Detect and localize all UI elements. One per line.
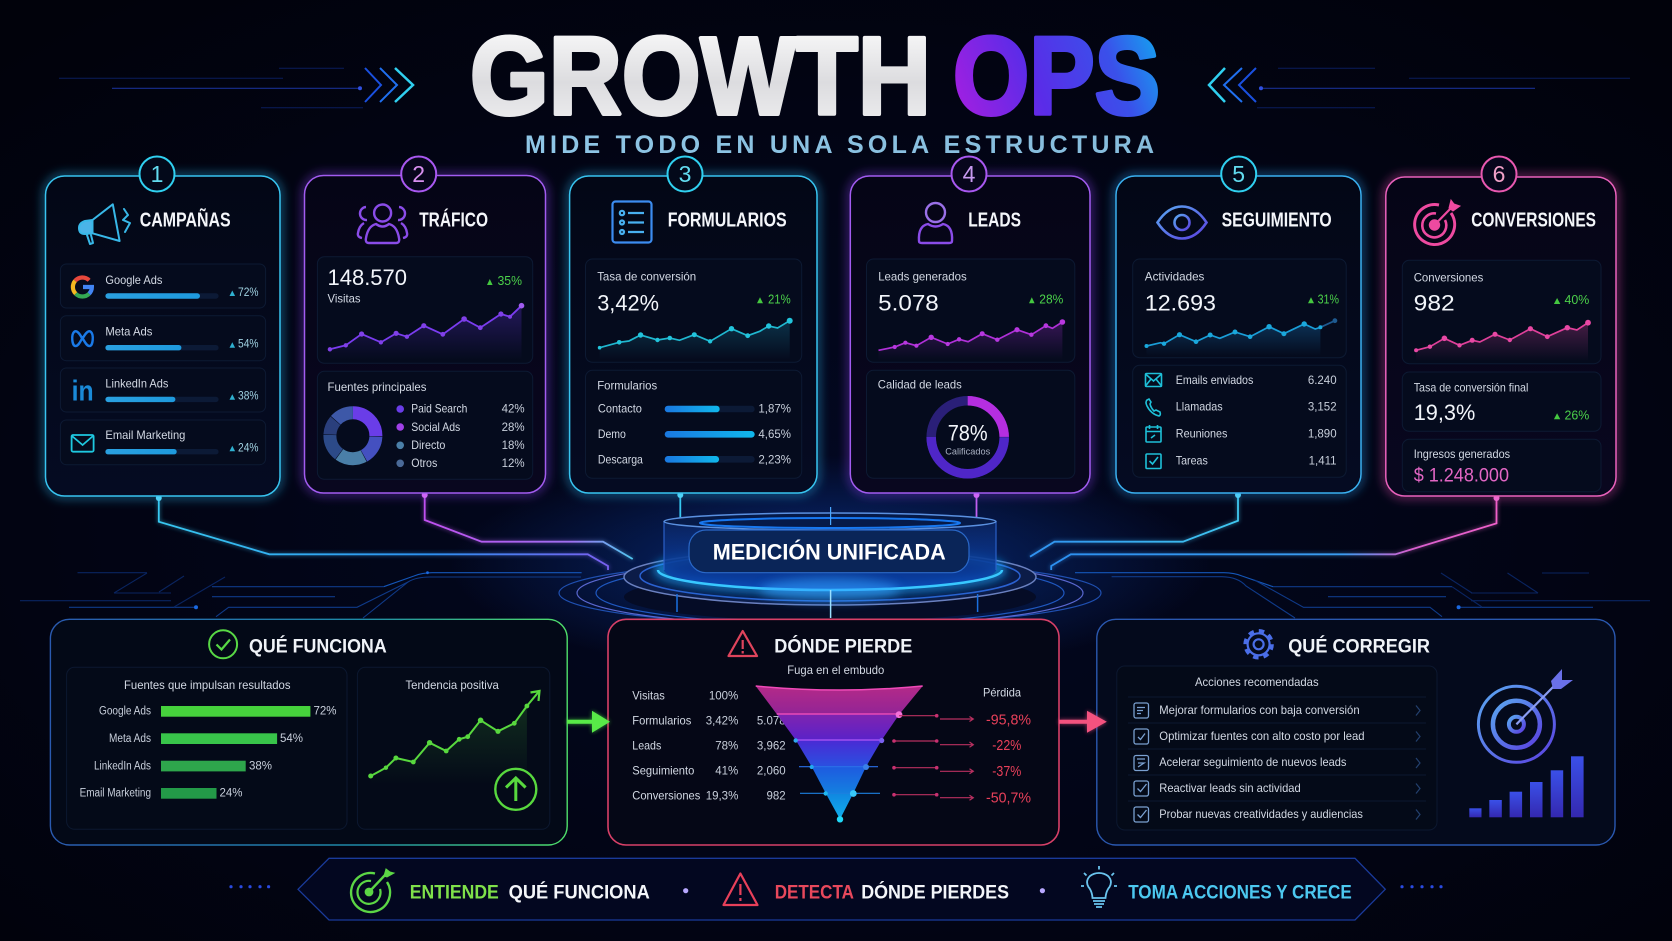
panel: tasa final xyxy=(1402,372,1601,431)
panel: fuentes principales xyxy=(317,371,533,479)
panel: leads generados xyxy=(866,259,1075,362)
panel: visitas: Visitas xyxy=(328,292,360,306)
panel: formularios table: 2,23% xyxy=(758,454,791,466)
funnel table: 3,42% xyxy=(706,715,738,727)
panel: calidad de leads: 78% xyxy=(948,420,988,446)
panel: actividades: 31% xyxy=(1318,291,1339,306)
panel: formularios table: 1,87% xyxy=(758,404,791,416)
subtitle: MIDE TODO EN UNA SOLA ESTRUCTURA xyxy=(525,131,1154,159)
panel: activity table: 3,152 xyxy=(1308,402,1337,414)
loss column: Pérdida xyxy=(983,686,1021,700)
loss column: -37% xyxy=(992,763,1021,780)
panel: tasa de conversión: Tasa de conversión xyxy=(597,270,696,284)
legend xyxy=(396,402,525,470)
slogan: toma acciones: TOMA ACCIONES Y CRECE xyxy=(1128,883,1352,904)
panel: activity table xyxy=(1133,365,1346,477)
funnel table: Seguimiento xyxy=(632,763,695,777)
icon: checkbox xyxy=(1146,454,1161,468)
badge 6 xyxy=(1482,156,1516,192)
row: linkedin ads xyxy=(60,368,266,412)
badge 2: 2 xyxy=(412,161,425,187)
panel: tasa final: 26% xyxy=(1564,407,1590,422)
icon: green target xyxy=(351,869,394,912)
panel: activity table: Llamadas xyxy=(1176,400,1223,414)
icon: envelope xyxy=(72,435,94,452)
card 3: formularios xyxy=(570,156,817,493)
panel: visitas xyxy=(317,257,533,363)
panel: formularios table xyxy=(586,370,802,478)
action list: Reactivar leads sin actividad xyxy=(1159,781,1301,795)
chart: conversiones sparkline xyxy=(1414,320,1591,361)
panel: acciones recomendadas: Acciones recomendadas xyxy=(1195,675,1319,689)
panel: actividades: Actividades xyxy=(1145,270,1204,284)
panel: dónde pierde xyxy=(608,619,1059,845)
badge 3 xyxy=(668,156,702,192)
row: linkedin ads: LinkedIn Ads xyxy=(105,376,168,390)
title word: OPS: OPS xyxy=(953,15,1160,138)
hub label: MEDICIÓN UNIFICADA xyxy=(713,539,946,564)
panel: actividades: 12.693 xyxy=(1145,291,1216,316)
icon: check circle xyxy=(209,630,237,658)
badge 1: 1 xyxy=(151,161,163,187)
title word: GROWTH: GROWTH xyxy=(470,15,931,138)
hub label xyxy=(689,530,969,573)
slogan: detecta xyxy=(775,882,1009,904)
action list: Optimizar fuentes con alto costo por lead xyxy=(1159,729,1365,743)
panel: formularios table: Descarga xyxy=(598,452,643,466)
panel: conversiones: Conversiones xyxy=(1414,270,1483,284)
icon: warning xyxy=(728,631,757,656)
badge 1 xyxy=(140,156,174,192)
panel: visitas: 35% xyxy=(498,273,522,288)
row: email marketing: 24% xyxy=(238,440,259,454)
row: email marketing: Email Marketing xyxy=(105,428,185,442)
funnel table: Formularios xyxy=(632,713,691,727)
slogan: detecta: DÓNDE PIERDES xyxy=(861,882,1009,904)
panel: tasa final: 19,3% xyxy=(1414,400,1475,425)
card 2: tráfico xyxy=(304,156,546,493)
left title arrows xyxy=(59,68,413,108)
funnel table: 78% xyxy=(715,740,738,752)
leak arrows xyxy=(892,714,973,800)
icon: calendar xyxy=(1146,425,1161,442)
loss column xyxy=(983,686,1031,806)
icon: megaphone xyxy=(79,204,130,244)
panel: conversiones: 40% xyxy=(1564,292,1590,307)
badge 4: 4 xyxy=(963,161,976,187)
row: linkedin ads: 38% xyxy=(238,389,259,403)
funnel table: 982 xyxy=(767,790,786,802)
funnel table: 3,962 xyxy=(757,740,786,752)
row: meta ads: Meta Ads xyxy=(105,325,152,339)
chart: donut xyxy=(330,413,376,459)
connectors to central hub xyxy=(156,492,1499,570)
chart: source bars: 38% xyxy=(249,760,272,772)
icon: google xyxy=(73,278,92,296)
chart: source bars xyxy=(80,706,336,800)
panel: calidad de leads: Calificados xyxy=(945,446,990,457)
icon: eye xyxy=(1158,206,1206,238)
icon: red warning xyxy=(724,874,758,905)
card 1: campañas xyxy=(46,156,280,496)
funnel table: 5.078 xyxy=(757,715,786,727)
legend: 12% xyxy=(502,458,525,470)
funnel table xyxy=(632,688,786,802)
panel: visitas: 148.570 xyxy=(328,265,407,290)
arrow: pink to corregir xyxy=(1059,711,1107,733)
chart: positive trend xyxy=(368,691,540,785)
panel: leads generados: 5.078 xyxy=(878,291,939,316)
chart: source bars: Meta Ads xyxy=(109,733,151,745)
panel: activity table: Tareas xyxy=(1176,454,1208,468)
slogan: entiende xyxy=(410,882,650,904)
panel: qué corregir xyxy=(1097,619,1615,845)
chart: source bars: 54% xyxy=(280,733,303,745)
action list: Probar nuevas creatividades y audiencias xyxy=(1159,807,1363,821)
panel: formularios table: Contacto xyxy=(598,402,642,416)
row: email marketing xyxy=(60,420,266,465)
action list xyxy=(1128,697,1426,822)
heading: dónde pierde: DÓNDE PIERDE xyxy=(774,633,912,657)
icon: up arrow circle xyxy=(495,769,536,810)
funnel subtitle: Fuga en el embudo xyxy=(787,663,885,677)
panel: ingresos xyxy=(1402,439,1601,492)
chart: source bars: Google Ads xyxy=(99,706,151,718)
funnel table: 100% xyxy=(709,690,738,702)
badge 3: 3 xyxy=(679,161,691,187)
chart: source bars: 72% xyxy=(313,706,336,718)
panel: leads generados: 28% xyxy=(1039,291,1064,306)
panel: tasa de conversión: 3,42% xyxy=(597,291,659,316)
chart: conversion sparkline xyxy=(598,318,793,360)
panel: activity table: 1,411 xyxy=(1309,456,1337,468)
panel: fuentes que impulsan xyxy=(67,667,347,829)
heading: qué corregir: QUÉ CORREGIR xyxy=(1288,634,1430,657)
row: google ads xyxy=(60,264,266,308)
slogan: entiende: QUÉ FUNCIONA xyxy=(509,882,650,904)
funnel table: 2,060 xyxy=(757,765,786,777)
funnel table: Conversiones xyxy=(632,788,700,802)
heading: conversiones: CONVERSIONES xyxy=(1471,210,1596,232)
panel: calidad de leads xyxy=(866,370,1075,478)
legend: Paid Search xyxy=(411,402,467,416)
panel: actividades xyxy=(1133,259,1346,358)
icon: mail xyxy=(1146,374,1162,386)
side dots xyxy=(229,885,1443,888)
icon: meta xyxy=(72,331,93,346)
faint circuit traces xyxy=(20,571,1650,618)
panel: tasa de conversión xyxy=(586,259,802,362)
icon: person xyxy=(919,203,952,243)
panel: ingresos: $ 1.248.000 xyxy=(1414,466,1509,487)
right title arrows xyxy=(1209,68,1630,108)
funnel table: 41% xyxy=(715,765,738,777)
chart: source bars: 24% xyxy=(219,788,242,800)
badge 5: 5 xyxy=(1232,161,1245,187)
badge 6: 6 xyxy=(1493,161,1505,187)
chart: actividades sparkline xyxy=(1144,318,1337,356)
row: google ads: 72% xyxy=(238,285,259,299)
badge 5 xyxy=(1221,156,1256,192)
heading: formularios: FORMULARIOS xyxy=(668,210,787,232)
row: meta ads: 54% xyxy=(238,337,259,351)
heading: leads: LEADS xyxy=(968,210,1021,232)
badge 4 xyxy=(952,156,986,192)
card 5: seguimiento xyxy=(1116,156,1361,493)
slogan: detecta: DETECTA xyxy=(775,883,854,904)
legend: Directo xyxy=(411,438,446,452)
row: meta ads xyxy=(60,316,266,361)
chart: rising bars xyxy=(1469,756,1584,817)
panel: ingresos: Ingresos generados xyxy=(1414,447,1510,461)
legend: 28% xyxy=(502,422,525,434)
central hub: medición unificada xyxy=(559,507,1101,626)
panel: activity table: Reuniones xyxy=(1176,427,1227,441)
funnel chart xyxy=(756,686,923,822)
panel: activity table: Emails enviados xyxy=(1176,373,1253,387)
panel: qué funciona xyxy=(50,619,567,845)
panel: conversiones xyxy=(1402,260,1601,364)
chart: leads sparkline xyxy=(878,319,1065,360)
funnel table: Leads xyxy=(632,738,661,752)
title xyxy=(470,15,1160,138)
funnel table: 19,3% xyxy=(706,790,738,802)
panel: formularios table: Formularios xyxy=(597,378,657,392)
bottom banner xyxy=(298,858,1385,920)
panel: tendencia positiva: Tendencia positiva xyxy=(406,678,499,692)
action list: Acelerar seguimiento de nuevos leads xyxy=(1159,755,1346,769)
panel: leads generados: Leads generados xyxy=(878,270,967,284)
panel: fuentes principales: Fuentes principales xyxy=(328,380,426,394)
slogan: entiende: ENTIENDE xyxy=(410,883,499,904)
icon: linkedin: in xyxy=(72,376,94,408)
panel: conversiones: 982 xyxy=(1414,291,1455,316)
legend: 42% xyxy=(502,404,525,416)
panel: tasa final: Tasa de conversión final xyxy=(1414,380,1528,394)
arrow: green to pierde xyxy=(567,711,610,733)
loss column: -50,7% xyxy=(986,789,1031,806)
chart: leads quality ring xyxy=(931,401,1004,474)
legend: Otros xyxy=(411,456,437,470)
legend: Social Ads xyxy=(411,420,460,434)
chart: visitas sparkline xyxy=(328,303,524,360)
panel: calidad de leads: Calidad de leads xyxy=(878,378,962,392)
icon: form list xyxy=(612,202,652,242)
icon: target xyxy=(1415,200,1460,245)
loss column: -95,8% xyxy=(986,711,1031,728)
heading: qué funciona: QUÉ FUNCIONA xyxy=(249,634,387,657)
icon: lightbulb xyxy=(1081,866,1117,907)
card 6: conversiones xyxy=(1386,156,1616,496)
panel: tendencia positiva xyxy=(357,667,550,829)
funnel table: Visitas xyxy=(632,688,665,702)
icon: gear xyxy=(1245,631,1272,658)
icon: target with arrow xyxy=(1478,669,1573,762)
panel: activity table: 6.240 xyxy=(1308,375,1337,387)
badge 2 xyxy=(401,156,436,192)
action list: Mejorar formularios con baja conversión xyxy=(1159,703,1360,717)
loss column: -22% xyxy=(992,737,1021,754)
chart: source bars: LinkedIn Ads xyxy=(94,760,151,772)
heading: seguimiento: SEGUIMIENTO xyxy=(1222,210,1332,232)
panel: tasa de conversión: 21% xyxy=(768,291,791,306)
heading: campañas: CAMPAÑAS xyxy=(140,209,231,232)
heading: tráfico: TRÁFICO xyxy=(419,209,488,232)
panel: fuentes que impulsan: Fuentes que impulsan resultados xyxy=(124,678,290,692)
icon: phone xyxy=(1146,399,1160,416)
panel: activity table: 1,890 xyxy=(1308,429,1337,441)
panel: acciones recomendadas xyxy=(1117,666,1437,830)
card 4: leads xyxy=(850,156,1090,493)
icon: people xyxy=(358,204,407,243)
panel: formularios table: 4,65% xyxy=(758,429,791,441)
row: google ads: Google Ads xyxy=(105,273,162,287)
legend: 18% xyxy=(502,440,525,452)
panel: formularios table: Demo xyxy=(598,427,626,441)
chart: source bars: Email Marketing xyxy=(80,788,151,800)
